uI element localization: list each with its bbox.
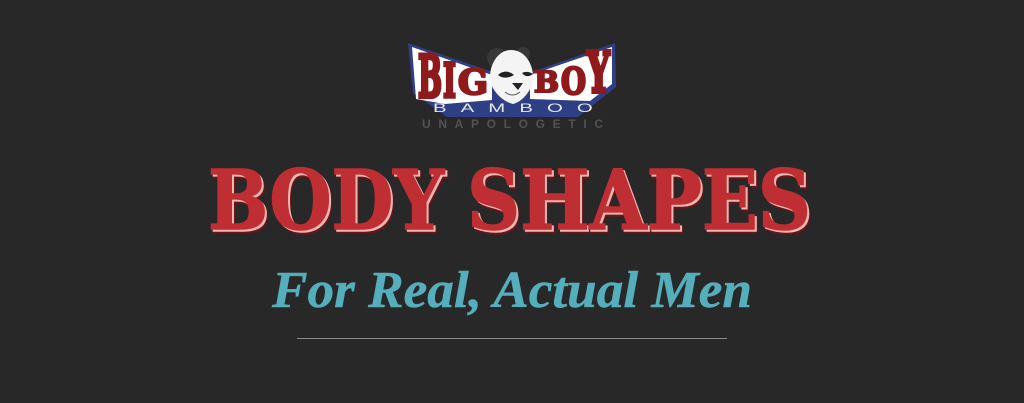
subtitle: For Real, Actual Men [271, 262, 752, 319]
title [208, 153, 814, 253]
logo word BIG: B [418, 44, 442, 111]
icon: panda head [487, 47, 533, 104]
logo word BIG [412, 44, 492, 111]
logo word BIG: G [458, 63, 488, 103]
title face: SHAPES [467, 153, 811, 249]
logo word BOY: Y [586, 41, 610, 106]
title face [208, 153, 811, 249]
logo blue badge [408, 43, 616, 117]
title face: BODY [208, 153, 445, 249]
icon: Big Boy Bamboo logo [408, 41, 616, 131]
logo word BOY: O [561, 61, 586, 103]
logo tagline: UNAPOLOGETIC [422, 117, 603, 131]
logo word BOY: B [534, 65, 559, 99]
title highlight: BODY [210, 155, 447, 251]
logo word BAMBOO: BAMBOO [433, 101, 593, 115]
logo word BOY [530, 41, 612, 106]
divider line [297, 338, 727, 339]
logo word BIG: I [443, 53, 456, 108]
title shadow [211, 157, 814, 253]
title shadow: SHAPES [470, 157, 814, 253]
title highlight [210, 155, 813, 251]
title highlight: SHAPES [469, 155, 813, 251]
title shadow: BODY [211, 157, 448, 253]
